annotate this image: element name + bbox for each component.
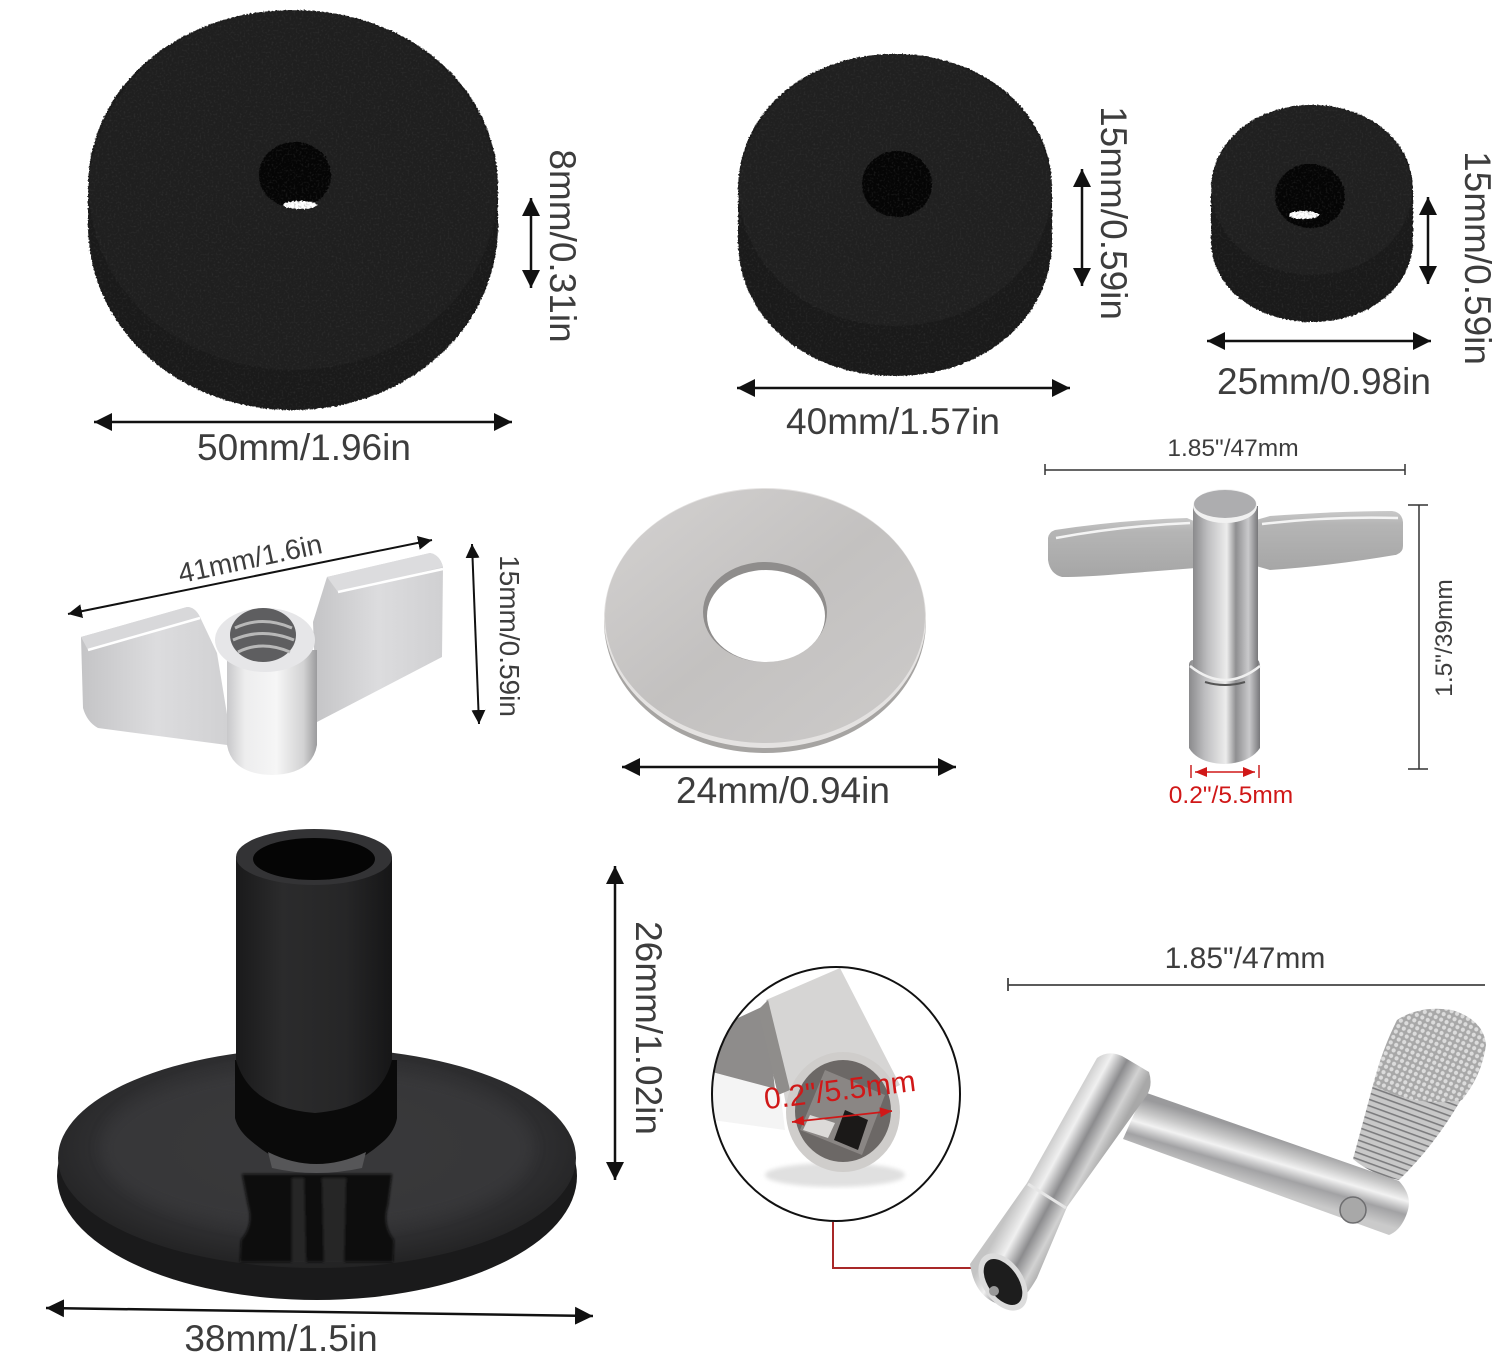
felt washer small <box>1211 105 1413 322</box>
felt washer large <box>88 10 498 410</box>
drum key T <box>1048 489 1403 764</box>
callout line <box>833 1222 983 1268</box>
zoom circle: socket detail <box>712 967 960 1221</box>
dimension: small felt thickness: 15mm/0.59in <box>1457 151 1498 365</box>
dimension: wing nut width: 41mm/1.6in <box>175 528 325 589</box>
dimension: metal washer width: 24mm/0.94in <box>676 770 890 811</box>
dimension: sleeve width <box>46 1308 593 1359</box>
dimension: wing nut height <box>472 544 525 724</box>
dimension: T key width: 1.85"/47mm <box>1167 435 1299 462</box>
dimension: T key socket, red <box>1169 765 1293 809</box>
zoom circle: socket detail: 0.2"/5.5mm <box>762 1065 917 1116</box>
felt washer medium <box>738 54 1052 376</box>
cymbal sleeve <box>57 829 577 1300</box>
dimension: large felt thickness: 8mm/0.31in <box>542 149 583 343</box>
wing nut <box>81 553 443 775</box>
dimension: wing nut width <box>68 528 432 614</box>
dimension: T key width <box>1045 435 1405 475</box>
dimension: T key socket, red: 0.2"/5.5mm <box>1169 782 1293 809</box>
dimension: T key height <box>1408 505 1458 769</box>
dimension: sleeve width: 38mm/1.5in <box>184 1318 378 1359</box>
dimension: sleeve height: 26mm/1.02in <box>628 921 669 1135</box>
dimension: T key height: 1.5"/39mm <box>1431 579 1458 697</box>
dimension: wing nut height: 15mm/0.59in <box>494 555 525 717</box>
dimension: small felt width: 25mm/0.98in <box>1217 361 1431 402</box>
drum key crank <box>968 1009 1486 1320</box>
metal washer <box>604 488 926 753</box>
dimension: medium felt thickness: 15mm/0.59in <box>1093 106 1134 320</box>
dimension: crank width: 1.85"/47mm <box>1165 942 1325 975</box>
dimension: medium felt width: 40mm/1.57in <box>786 401 1000 442</box>
dimension: crank width <box>1008 942 1485 991</box>
dimension: large felt width: 50mm/1.96in <box>197 427 411 468</box>
